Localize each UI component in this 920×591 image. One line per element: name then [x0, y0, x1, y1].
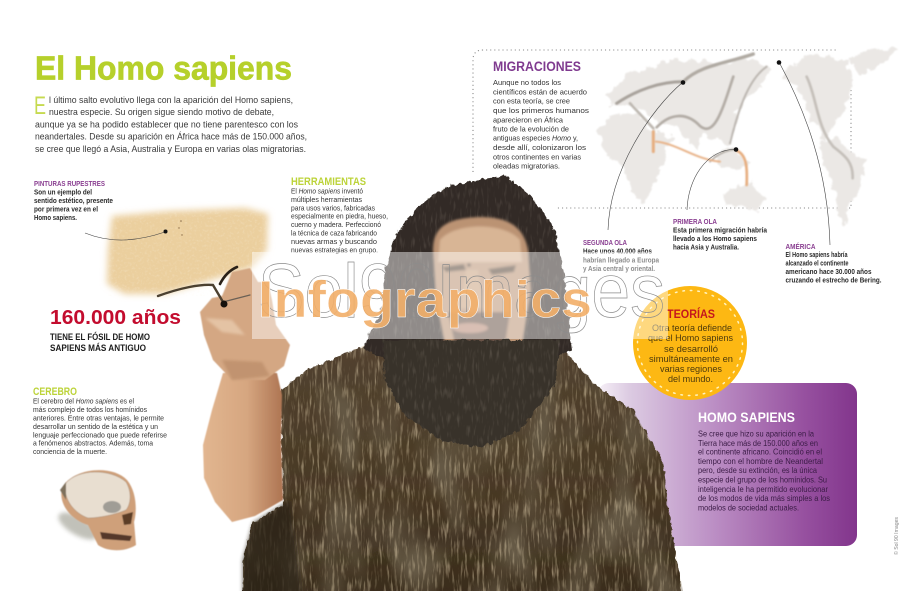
panel: homo sapiens: Se cree que hizo su aparición en la — [698, 430, 815, 438]
intro paragraph: l último salto evolutivo llega con la aparición del Homo sapiens, — [49, 94, 293, 105]
watermark: Sol90Images — [258, 249, 665, 334]
statistic: 160.000 años — [50, 307, 181, 354]
heading: MIGRACIONES — [493, 59, 581, 74]
credit: © Sol 90 Images — [893, 517, 900, 555]
label: américa: El Homo sapiens habría — [786, 250, 848, 259]
panel: cerebro: a fenómenos abstractos. Además, toma — [33, 438, 154, 448]
charcoal stick — [158, 267, 250, 308]
body text: científicos están de acuerdo — [493, 88, 587, 96]
icon: skull — [54, 470, 136, 550]
label: primera ola — [673, 147, 768, 252]
panel: homo sapiens: pero, desde su extinción, es la única — [698, 466, 818, 475]
panel: herramientas: para usos varios, fabricadas — [291, 204, 375, 212]
label: primera ola: llevado a los Homo sapiens — [673, 234, 757, 243]
intro paragraph: se cree que llegó a Asia, Australia y Europa en varias olas migratorias. — [35, 143, 306, 154]
label: segunda ola: y Asia central y oriental. — [583, 264, 655, 273]
callout: teorías: que el Homo sapiens — [648, 332, 733, 343]
body text: con esta teoría, se cree — [493, 96, 570, 106]
panel: herramientas: HERRAMIENTAS — [291, 176, 366, 188]
body text: Aunque no todos los — [493, 78, 561, 87]
panel: homo sapiens: modelos de sociedad actuales. — [698, 504, 799, 512]
label: segunda ola: habrían llegado a Europa — [583, 256, 660, 264]
panel: herramientas: nuevas estrategias en grupo. — [291, 246, 378, 254]
panel: homo sapiens: HOMO SAPIENS — [698, 410, 795, 425]
body text: que los primeros humanos — [493, 106, 589, 115]
panel: pinturas rupestres text: Son un ejemplo del — [34, 188, 92, 196]
panel: homo sapiens: el continente africano. Coincidió en el — [698, 448, 822, 456]
statistic: 160.000 años: 160.000 años — [50, 307, 181, 329]
panel: pinturas rupestres text: Homo sapiens. — [34, 213, 77, 222]
label: segunda ola — [583, 80, 685, 273]
panel: cerebro: más complejo de todos los homínidos — [33, 405, 147, 414]
label: américa: alcanzado el continente — [786, 258, 848, 268]
panel: homo sapiens — [598, 383, 857, 546]
body text — [493, 78, 589, 170]
label: segunda ola: SEGUNDA OLA — [583, 238, 627, 247]
panel: herramientas: nuevas armas y buscando — [291, 237, 377, 246]
intro paragraph: nuestra especie. Su origen sigue siendo motivo de debate, — [49, 106, 274, 117]
panel: herramientas: cuerno y madera. Perfeccionó — [291, 220, 381, 229]
label: segunda ola: Hace unos 40.000 años — [583, 246, 652, 256]
leader line — [85, 232, 165, 240]
body text: oleadas migratorias. — [493, 162, 560, 170]
panel: pinturas rupestres text: por primera vez en el — [34, 204, 98, 214]
body text: fruto de la evolución de — [493, 124, 569, 134]
label: américa: cruzando el estrecho de Bering. — [786, 276, 882, 284]
cave painting patch — [85, 208, 270, 296]
body text: antiguas especies Homo y, — [493, 134, 578, 142]
body text: otros continentes en varias — [493, 152, 581, 162]
face — [433, 217, 531, 345]
migration routes — [617, 54, 853, 185]
panel: pinturas rupestres text: PINTURAS RUPESTRES — [34, 179, 105, 188]
panel: pinturas rupestres text — [34, 179, 113, 222]
label: américa — [777, 60, 882, 285]
panel: cerebro: lenguaje perfeccionado que puede referirse — [33, 430, 167, 440]
panel: homo sapiens: tiempo con el hombre de Neandertal — [698, 457, 823, 466]
panel: cerebro: desarrollar un sentido de la estética y un — [33, 422, 158, 431]
fur garment — [240, 340, 690, 591]
panel: homo sapiens: de los modos de vida más simples a los — [698, 494, 830, 503]
label: américa: americano hace 30.000 años — [786, 267, 872, 276]
callout: teorías: TEORÍAS — [667, 306, 715, 321]
callout: teorías: Otra teoría defiende — [652, 322, 732, 333]
statistic: 160.000 años: TIENE EL FÓSIL DE HOMO — [50, 331, 150, 343]
body text: desde allí, colonizaron los — [493, 143, 586, 152]
callout: teorías: varias regiones — [660, 363, 722, 374]
hair — [363, 174, 572, 360]
beard — [380, 336, 565, 451]
callout: teorías: simultáneamente en — [649, 353, 733, 364]
label: primera ola: Esta primera migración habría — [673, 226, 768, 234]
label: primera ola: PRIMERA OLA — [673, 217, 717, 226]
panel: herramientas — [291, 176, 388, 254]
panel: herramientas: especialmente en piedra, hueso, — [291, 212, 388, 220]
panel: homo sapiens: especie del grupo de los homínidos. Su — [698, 476, 827, 484]
drop cap: E — [34, 92, 46, 120]
panel: cerebro: CEREBRO — [33, 386, 77, 398]
world map — [600, 49, 898, 223]
panel: cerebro — [33, 386, 167, 456]
intro paragraph: aunque ya se ha podido establecer que no tiene parentesco con los — [35, 118, 298, 130]
dotted frame — [473, 50, 851, 208]
body text: aparecieron en África — [493, 116, 564, 124]
intro paragraph: neandertales. Desde su aparición en África hace más de 150.000 años, — [35, 130, 307, 142]
label: américa: AMÉRICA — [786, 242, 816, 251]
panel: cerebro: conciencia de la muerte. — [33, 447, 107, 456]
panel: herramientas: El Homo sapiens inventó — [291, 186, 363, 196]
label: primera ola: hacia Asia y Australia. — [673, 242, 739, 252]
panel: cerebro: El cerebro del Homo sapiens es el — [33, 396, 134, 406]
arm and hand — [200, 268, 290, 522]
watermark: Infographics — [258, 271, 592, 329]
figure: homo sapiens man — [158, 170, 690, 591]
panel: pinturas rupestres text: sentido estético, presente — [34, 196, 113, 205]
intro paragraph — [34, 92, 307, 154]
callout: teorías — [633, 286, 747, 400]
callout: teorías: se desarrolló — [664, 343, 718, 354]
statistic: 160.000 años: SAPIENS MÁS ANTIGUO — [50, 343, 146, 354]
panel: herramientas: la técnica de caza fabricando — [291, 228, 377, 238]
panel: cerebro: anteriores. Entre otras ventajas, le permite — [33, 414, 164, 422]
panel: homo sapiens: inteligencia le ha permitido evolucionar — [698, 485, 828, 494]
panel: migraciones — [473, 49, 898, 285]
panel: herramientas: múltiples herramientas — [291, 195, 362, 204]
callout: teorías: del mundo. — [668, 373, 713, 384]
panel: homo sapiens: Tierra hace más de 150.000 años en — [698, 439, 818, 448]
title: El Homo sapiens — [35, 50, 292, 86]
